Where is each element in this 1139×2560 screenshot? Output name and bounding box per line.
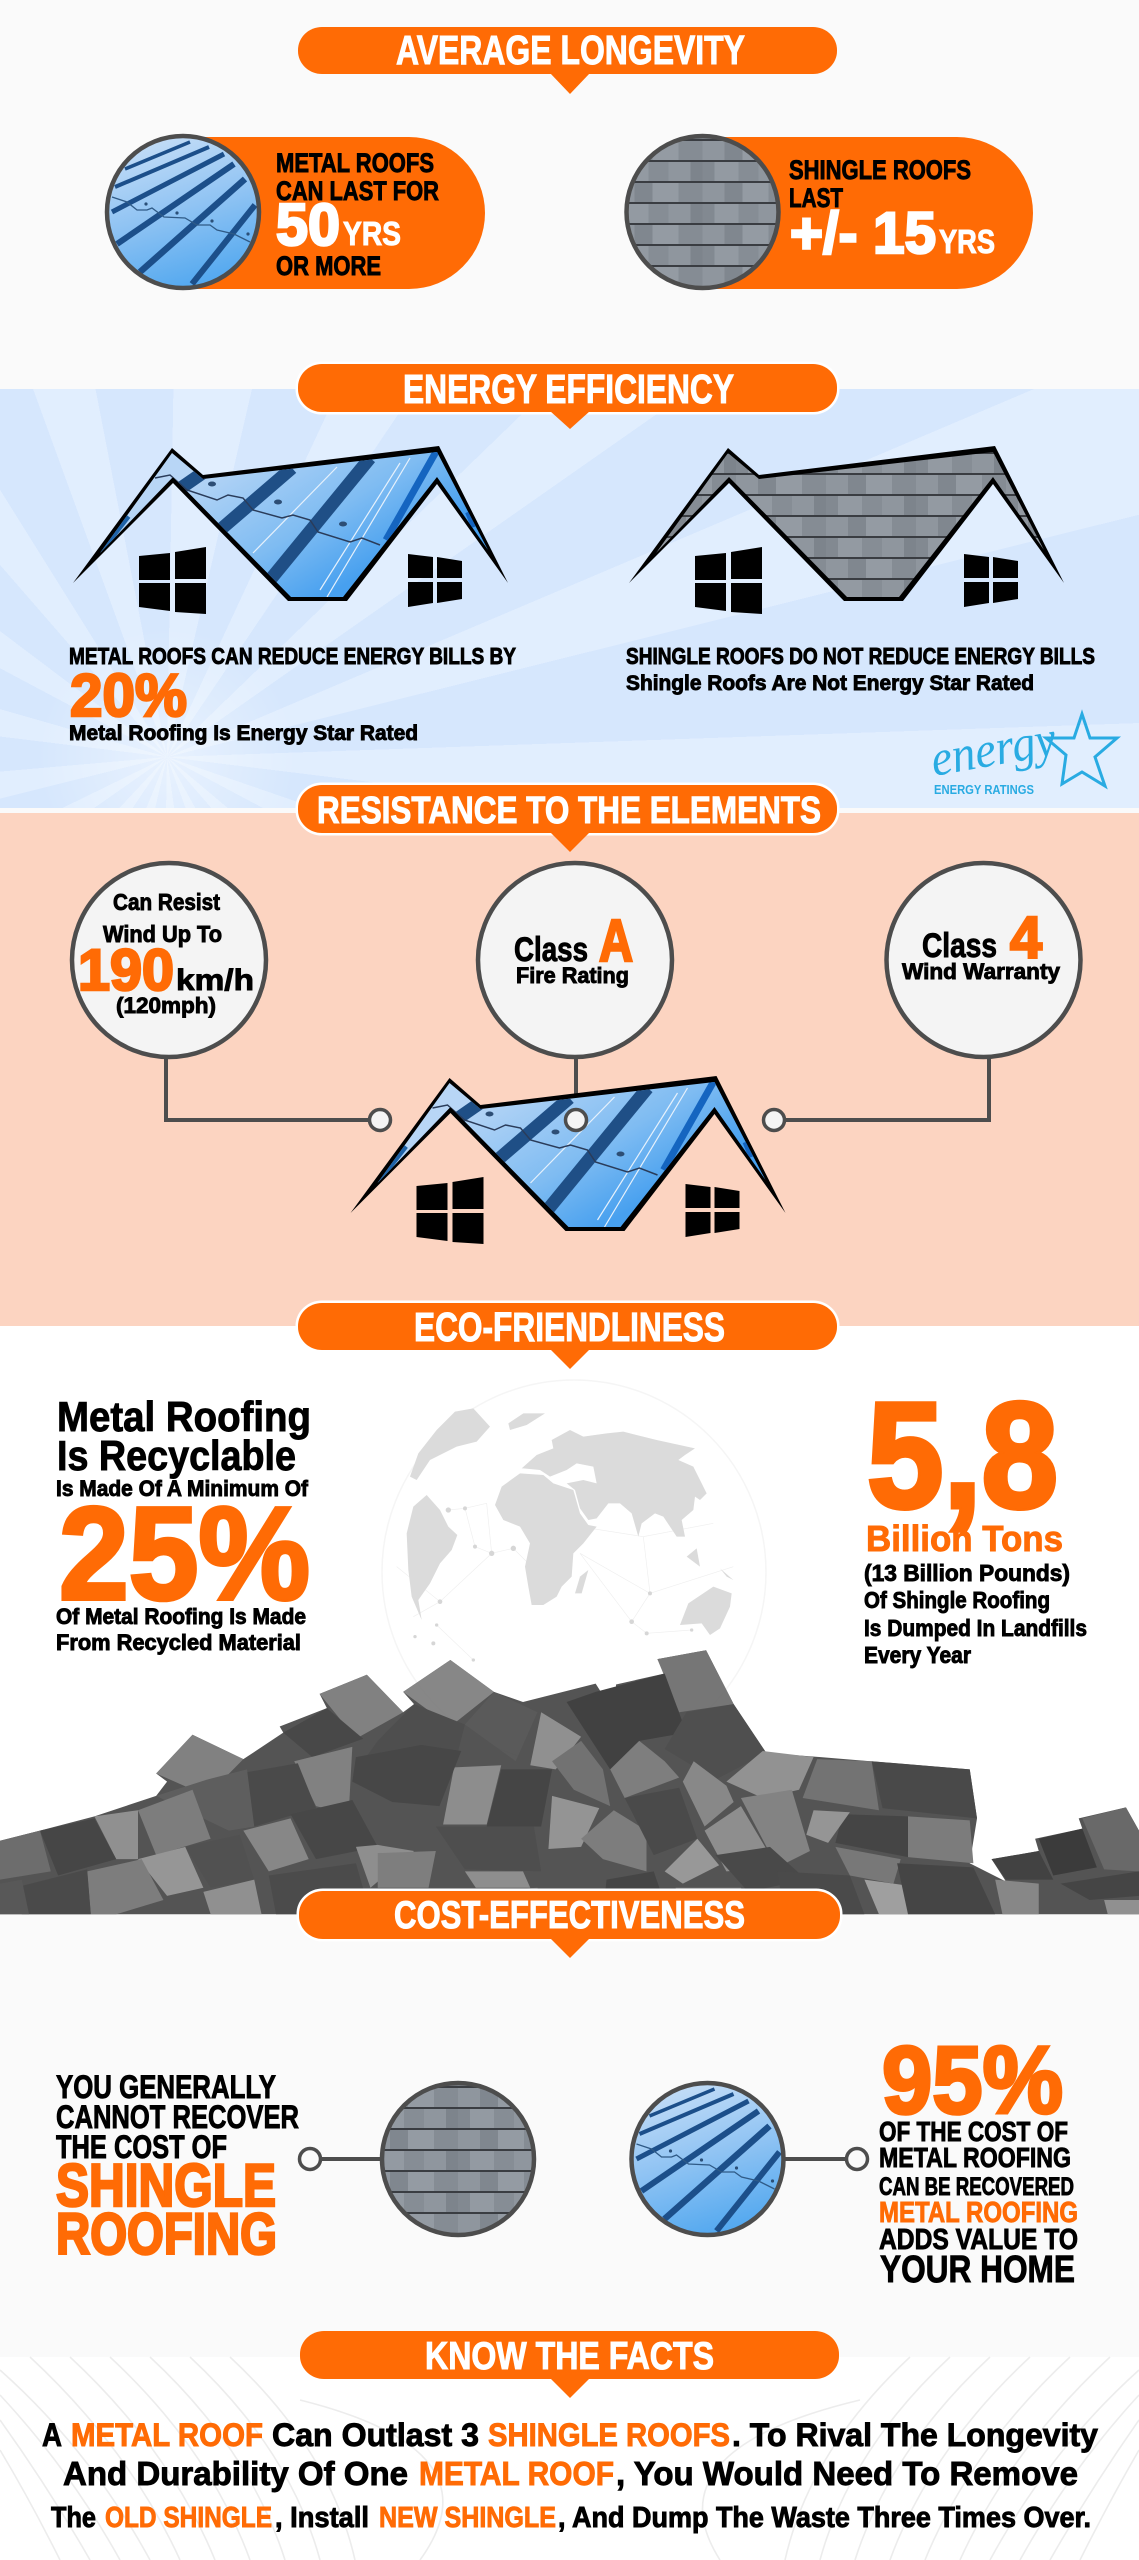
text block: shingle landfill waste: (13 Billion Pounds) [864,1560,1070,1586]
text block: cannot recover shingle cost: YOU GENERALLY [56,2069,276,2105]
text block: 95 percent recovered: 95% [882,2027,1063,2134]
text block: metal roofing is recyclable [56,1393,311,1655]
text block: cannot recover shingle cost: THE COST OF [56,2129,227,2165]
text block: closing facts: METAL ROOF [419,2455,614,2492]
text block: metal roofs energy savings [69,643,516,745]
callout: metal roofs last 50 years: OR MORE [276,251,381,281]
callout circle: wind warranty [886,863,1080,1057]
icon: metal roof disc [103,132,263,292]
callout circle: wind warranty: 4 [1010,905,1042,971]
connector and disc: metal [628,2079,868,2239]
text block: closing facts: . To Rival The Longevity [732,2417,1098,2453]
text block: shingle landfill waste: Is Dumped In Landfills [864,1615,1087,1641]
heading: resistance to the elements [298,785,837,852]
callout circle: wind resistance: Can Resist [113,889,220,915]
callout circle: fire rating [478,863,672,1057]
callout circle: wind resistance: (120mph) [116,993,216,1018]
text block: shingle landfill waste: Of Shingle Roofing [864,1587,1050,1613]
illustration: metal roof house with callout points [348,1070,788,1244]
text block: closing facts: , You Would Need To Remove [616,2455,1078,2492]
text block: 95 percent recovered [879,2027,1078,2291]
text block: 95 percent recovered: CAN BE RECOVERED [879,2173,1074,2201]
callout: metal roofs last 50 years: METAL ROOFS [276,148,434,178]
text block: shingle landfill waste: Billion Tons [866,1518,1063,1559]
heading: energy efficiency: ENERGY EFFICIENCY [403,366,734,412]
callout circle: wind resistance: Wind Up To [103,921,222,947]
callout circle: wind resistance: km/h [176,964,254,997]
callout: shingle roofs last 15 years: SHINGLE ROOFS [789,155,971,185]
callout circle: wind resistance [72,863,266,1057]
text block: metal roofing is recyclable: 25% [59,1480,310,1627]
callout circle: wind warranty: Wind Warranty [902,959,1061,984]
callout dots [370,1110,784,1130]
heading: average longevity: AVERAGE LONGEVITY [396,27,745,73]
callout: shingle roofs last 15 years [626,136,1033,289]
text block: metal roofing is recyclable: Is Made Of A Minimum Of [56,1476,309,1501]
icon: energy star logo: energy [926,710,1061,787]
text block: 95 percent recovered: ADDS VALUE TO [879,2224,1078,2256]
illustration: shingle roof house [626,440,1066,614]
heading: resistance to the elements: RESISTANCE TO THE ELEMENTS [317,790,821,832]
text block: closing facts: , Install [275,2502,369,2534]
connectors from circles to roof [166,1056,989,1120]
heading: energy efficiency [298,364,837,429]
callout circle: wind warranty: Class [922,927,997,965]
callout circle: fire rating: Class [514,931,588,969]
callout: metal roofs last 50 years [103,132,485,292]
icon: energy star logo [926,710,1117,797]
text block: closing facts: SHINGLE ROOFS [488,2417,730,2453]
text block: 95 percent recovered: YOUR HOME [880,2249,1075,2291]
text block: closing facts [42,2417,1098,2534]
text block: closing facts: The [51,2502,96,2534]
text block: shingle roofs energy: Shingle Roofs Are Not Energy Star Rated [626,672,1034,695]
text block: metal roofs energy savings: 20% [70,662,187,729]
text block: closing facts: , And Dump The Waste Three Times Over. [558,2502,1091,2534]
text block: 95 percent recovered: METAL ROOFING [879,2142,1071,2173]
text block: closing facts: A [42,2417,62,2453]
text block: metal roofs energy savings: METAL ROOFS CAN REDUCE ENERGY BILLS BY [69,643,516,669]
text block: cannot recover shingle cost: CANNOT RECOVER [56,2099,299,2135]
callout: shingle roofs last 15 years: LAST [789,183,843,213]
connector and disc: shingle [300,2083,534,2235]
heading: cost-effectiveness [299,1891,840,1958]
text block: cannot recover shingle cost: SHINGLE [56,2152,276,2219]
callout circle: fire rating: A [599,908,633,974]
illustration: globe [382,1380,766,1764]
panel background: energy efficiency sun rays [0,389,1139,808]
text block: 95 percent recovered: METAL ROOFING [879,2197,1078,2229]
text block: metal roofing is recyclable: From Recycled Material [56,1630,301,1655]
text block: metal roofing is recyclable: Metal Roofing [57,1393,311,1440]
icon: shingle disc [626,136,778,288]
callout circle: wind resistance: 190 [78,938,174,1003]
text block: 95 percent recovered: OF THE COST OF [879,2116,1068,2147]
heading: average longevity [298,27,837,94]
callout: metal roofs last 50 years: CAN LAST FOR [276,176,439,206]
callout: metal roofs last 50 years: YRS [343,215,401,252]
text block: metal roofing is recyclable: Of Metal Roofing Is Made [56,1604,306,1629]
heading: know the facts [300,2331,839,2398]
text block: closing facts: METAL ROOF [71,2417,263,2453]
heading: eco-friendliness: ECO-FRIENDLINESS [414,1304,725,1350]
illustration: metal roof house [70,440,510,614]
heading: know the facts: KNOW THE FACTS [425,2335,714,2378]
panel: eco-friendliness background [0,1326,1139,1914]
panel: resistance background [0,813,1139,1326]
text block: shingle landfill waste: Every Year [864,1642,971,1668]
text block: cannot recover shingle cost: ROOFING [56,2202,277,2267]
text block: closing facts: And Durability Of One [63,2455,408,2492]
text block: shingle landfill waste: 5,8 [867,1371,1058,1539]
callout circle: fire rating: Fire Rating [516,963,629,988]
text block: closing facts: OLD SHINGLE [105,2502,272,2534]
callout: shingle roofs last 15 years: +/- 15 [790,201,936,266]
heading: eco-friendliness [298,1303,837,1369]
text block: metal roofs energy savings: Metal Roofing Is Energy Star Rated [69,722,418,745]
panel: know the facts background pattern [0,2357,1139,2560]
text block: closing facts: NEW SHINGLE [379,2502,556,2534]
text block: shingle landfill waste [864,1371,1087,1668]
icon: energy star logo: ENERGY RATINGS [934,782,1034,797]
illustration: pile of discarded shingles [0,1650,1139,1914]
callout: metal roofs last 50 years: 50 [276,192,340,258]
text block: cannot recover shingle cost [56,2069,299,2267]
callout: shingle roofs last 15 years: YRS [939,223,995,260]
text block: closing facts: Can Outlast 3 [272,2417,479,2453]
heading: cost-effectiveness: COST-EFFECTIVENESS [394,1894,745,1937]
text block: shingle roofs energy [626,643,1095,695]
text block: metal roofing is recyclable: Is Recyclable [57,1432,296,1479]
